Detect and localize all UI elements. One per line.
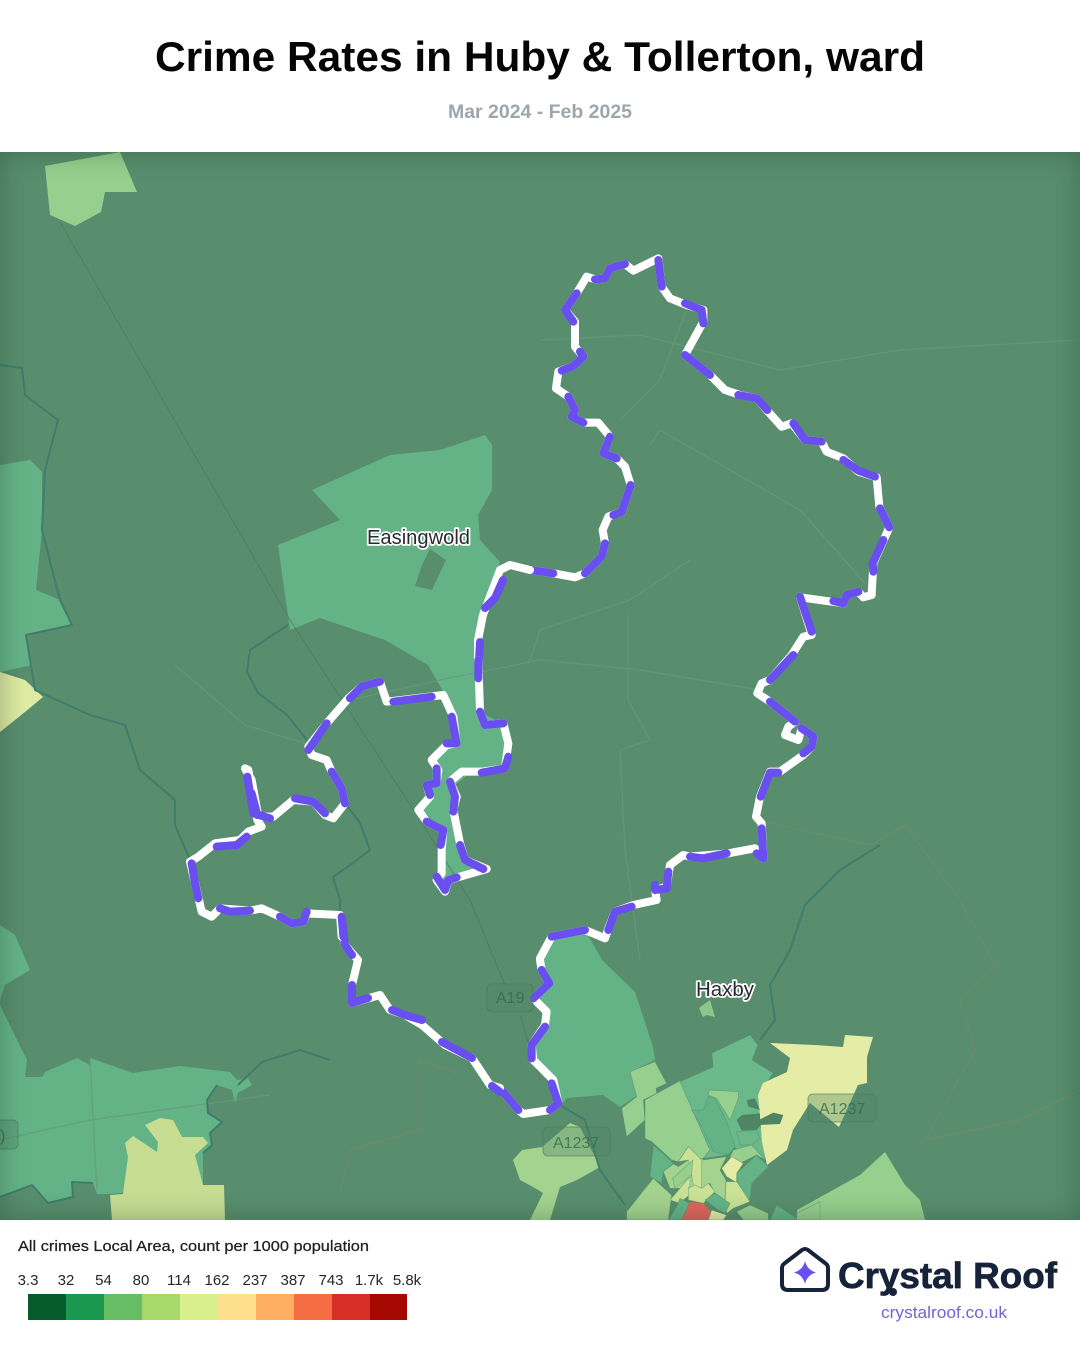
icon: key dot on the y: [889, 1288, 897, 1296]
legend tick labels: 5.8k: [393, 1272, 422, 1289]
legend colour scale: [28, 1294, 407, 1320]
legend tick labels: 743: [318, 1272, 344, 1289]
icon: house with star: [782, 1249, 828, 1290]
roads: [0, 222, 1080, 1190]
choropleth: area south of ward: [530, 930, 655, 1107]
legend tick labels: 237: [242, 1272, 268, 1289]
road label: cropped west: [0, 1120, 18, 1149]
wordmark: Crystal Roof: [838, 1255, 1058, 1296]
road label: A1237 east: A1237: [819, 1101, 865, 1118]
road label: cropped west: ): [0, 1128, 5, 1145]
choropleth: left edge areas: [0, 460, 72, 1000]
road label: A1237 south: [543, 1127, 610, 1156]
choropleth: south-west area: [0, 1005, 252, 1220]
legend tick labels: 1.7k: [355, 1272, 384, 1289]
subtitle: date range: Mar 2024 - Feb 2025: [448, 102, 632, 123]
choropleth: west York area: [513, 1123, 600, 1220]
boundary: south-west link: [340, 565, 530, 1092]
legend tick labels: 162: [204, 1272, 230, 1289]
title: Crime Rates in Huby & Tollerton, ward: [155, 33, 925, 80]
boundary: south section: [500, 960, 558, 1114]
map edge vignette: [0, 152, 1080, 1220]
ward boundary: [190, 258, 889, 1114]
boundary: north section: [530, 258, 889, 603]
logo: Crystal Roof: [782, 1249, 1058, 1322]
legend tick labels: 3.3: [18, 1272, 38, 1289]
legend tick labels: 32: [58, 1272, 74, 1289]
map base: [0, 152, 1080, 1220]
road label: A19: A19: [496, 990, 525, 1007]
legend title: All crimes Local Area, count per 1000 population: [18, 1238, 369, 1255]
boundary: west section: [190, 660, 508, 937]
legend tick labels: 80: [133, 1272, 149, 1289]
legend tick labels: 54: [95, 1272, 112, 1289]
legend tick labels: 387: [280, 1272, 306, 1289]
website link: crystalroof.co.uk: [881, 1304, 1008, 1322]
choropleth: top-left area: [45, 152, 137, 226]
boundary: east section: [540, 597, 813, 958]
choropleth: Haxby spot: [699, 1000, 715, 1017]
legend tick labels: 114: [167, 1272, 191, 1289]
choropleth: east side area: [797, 1152, 925, 1220]
legend: [18, 1238, 422, 1320]
place label: Haxby: Haxby: [696, 979, 754, 1001]
choropleth: York wards: [622, 1035, 873, 1220]
place label: Easingwold: Easingwold: [367, 527, 470, 549]
map panel: [0, 152, 1080, 1220]
road label: A1237 south: A1237: [553, 1135, 599, 1152]
choropleth: Easingwold area: [278, 435, 512, 885]
rivers: [0, 365, 1080, 1205]
road label: A1237 east: [808, 1094, 876, 1122]
road label: A19: [487, 984, 533, 1012]
legend tick labels: [18, 1272, 422, 1289]
